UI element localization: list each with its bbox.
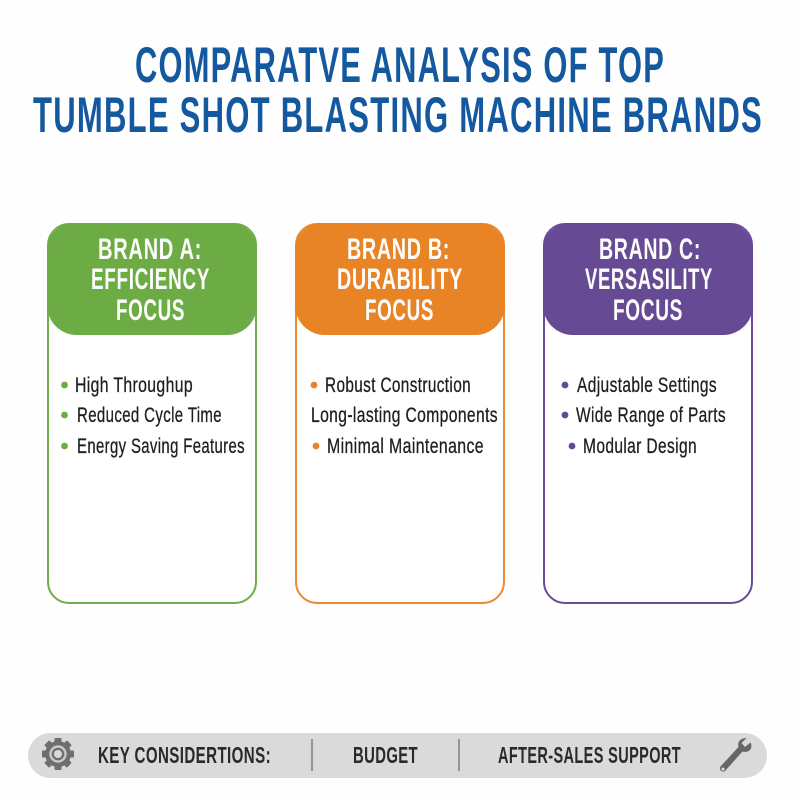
heading: Brand B durability focus: DURABILITY — [337, 263, 463, 296]
icon: gear — [42, 738, 74, 770]
heading: Brand B durability focus: FOCUS — [365, 294, 434, 327]
list: Brand A features: High Throughup — [75, 374, 193, 397]
heading: Brand C versatility focus: VERSASILITY — [585, 263, 713, 296]
panel: Brand A — [47, 223, 257, 603]
heading: Brand A efficiency focus — [47, 223, 257, 335]
list: Brand A features: Reduced Cycle Time — [77, 404, 222, 427]
panel: Brand B — [295, 223, 505, 603]
heading: Brand A efficiency focus: FOCUS — [116, 294, 185, 327]
title — [33, 37, 763, 143]
heading: Brand C versatility focus: FOCUS — [613, 294, 683, 327]
list: Brand A features — [61, 374, 245, 458]
list: Brand C features — [562, 374, 726, 458]
list: Brand B features: Robust Construction — [325, 374, 471, 397]
heading: Brand C versatility focus: BRAND C: — [599, 233, 701, 266]
panel: Brand C — [543, 223, 753, 603]
list: Brand C features: Adjustable Settings — [577, 374, 717, 397]
list: Brand B features: Long-lasting Components — [311, 404, 498, 427]
heading: Brand B durability focus — [295, 223, 505, 335]
label: budget: BUDGET — [353, 742, 418, 768]
heading: Brand C versatility focus — [543, 223, 753, 335]
heading: Brand A efficiency focus: BRAND A: — [98, 233, 202, 266]
list: Brand C features: Modular Design — [583, 435, 697, 458]
label: key considerations: KEY CONSIDERTIONS: — [98, 742, 271, 768]
list: Brand A features: Energy Saving Features — [77, 435, 245, 458]
list: Brand B features — [311, 374, 498, 458]
list: Brand B features: Minimal Maintenance — [327, 435, 484, 458]
list: Brand C features: Wide Range of Parts — [576, 404, 726, 427]
icon: wrench — [720, 738, 751, 772]
label: after-sales support: AFTER-SALES SUPPORT — [498, 742, 681, 768]
heading: Brand A efficiency focus: EFFICIENCY — [91, 263, 210, 296]
heading: Brand B durability focus: BRAND B: — [347, 233, 450, 266]
footer bar: key considerations — [28, 733, 767, 778]
